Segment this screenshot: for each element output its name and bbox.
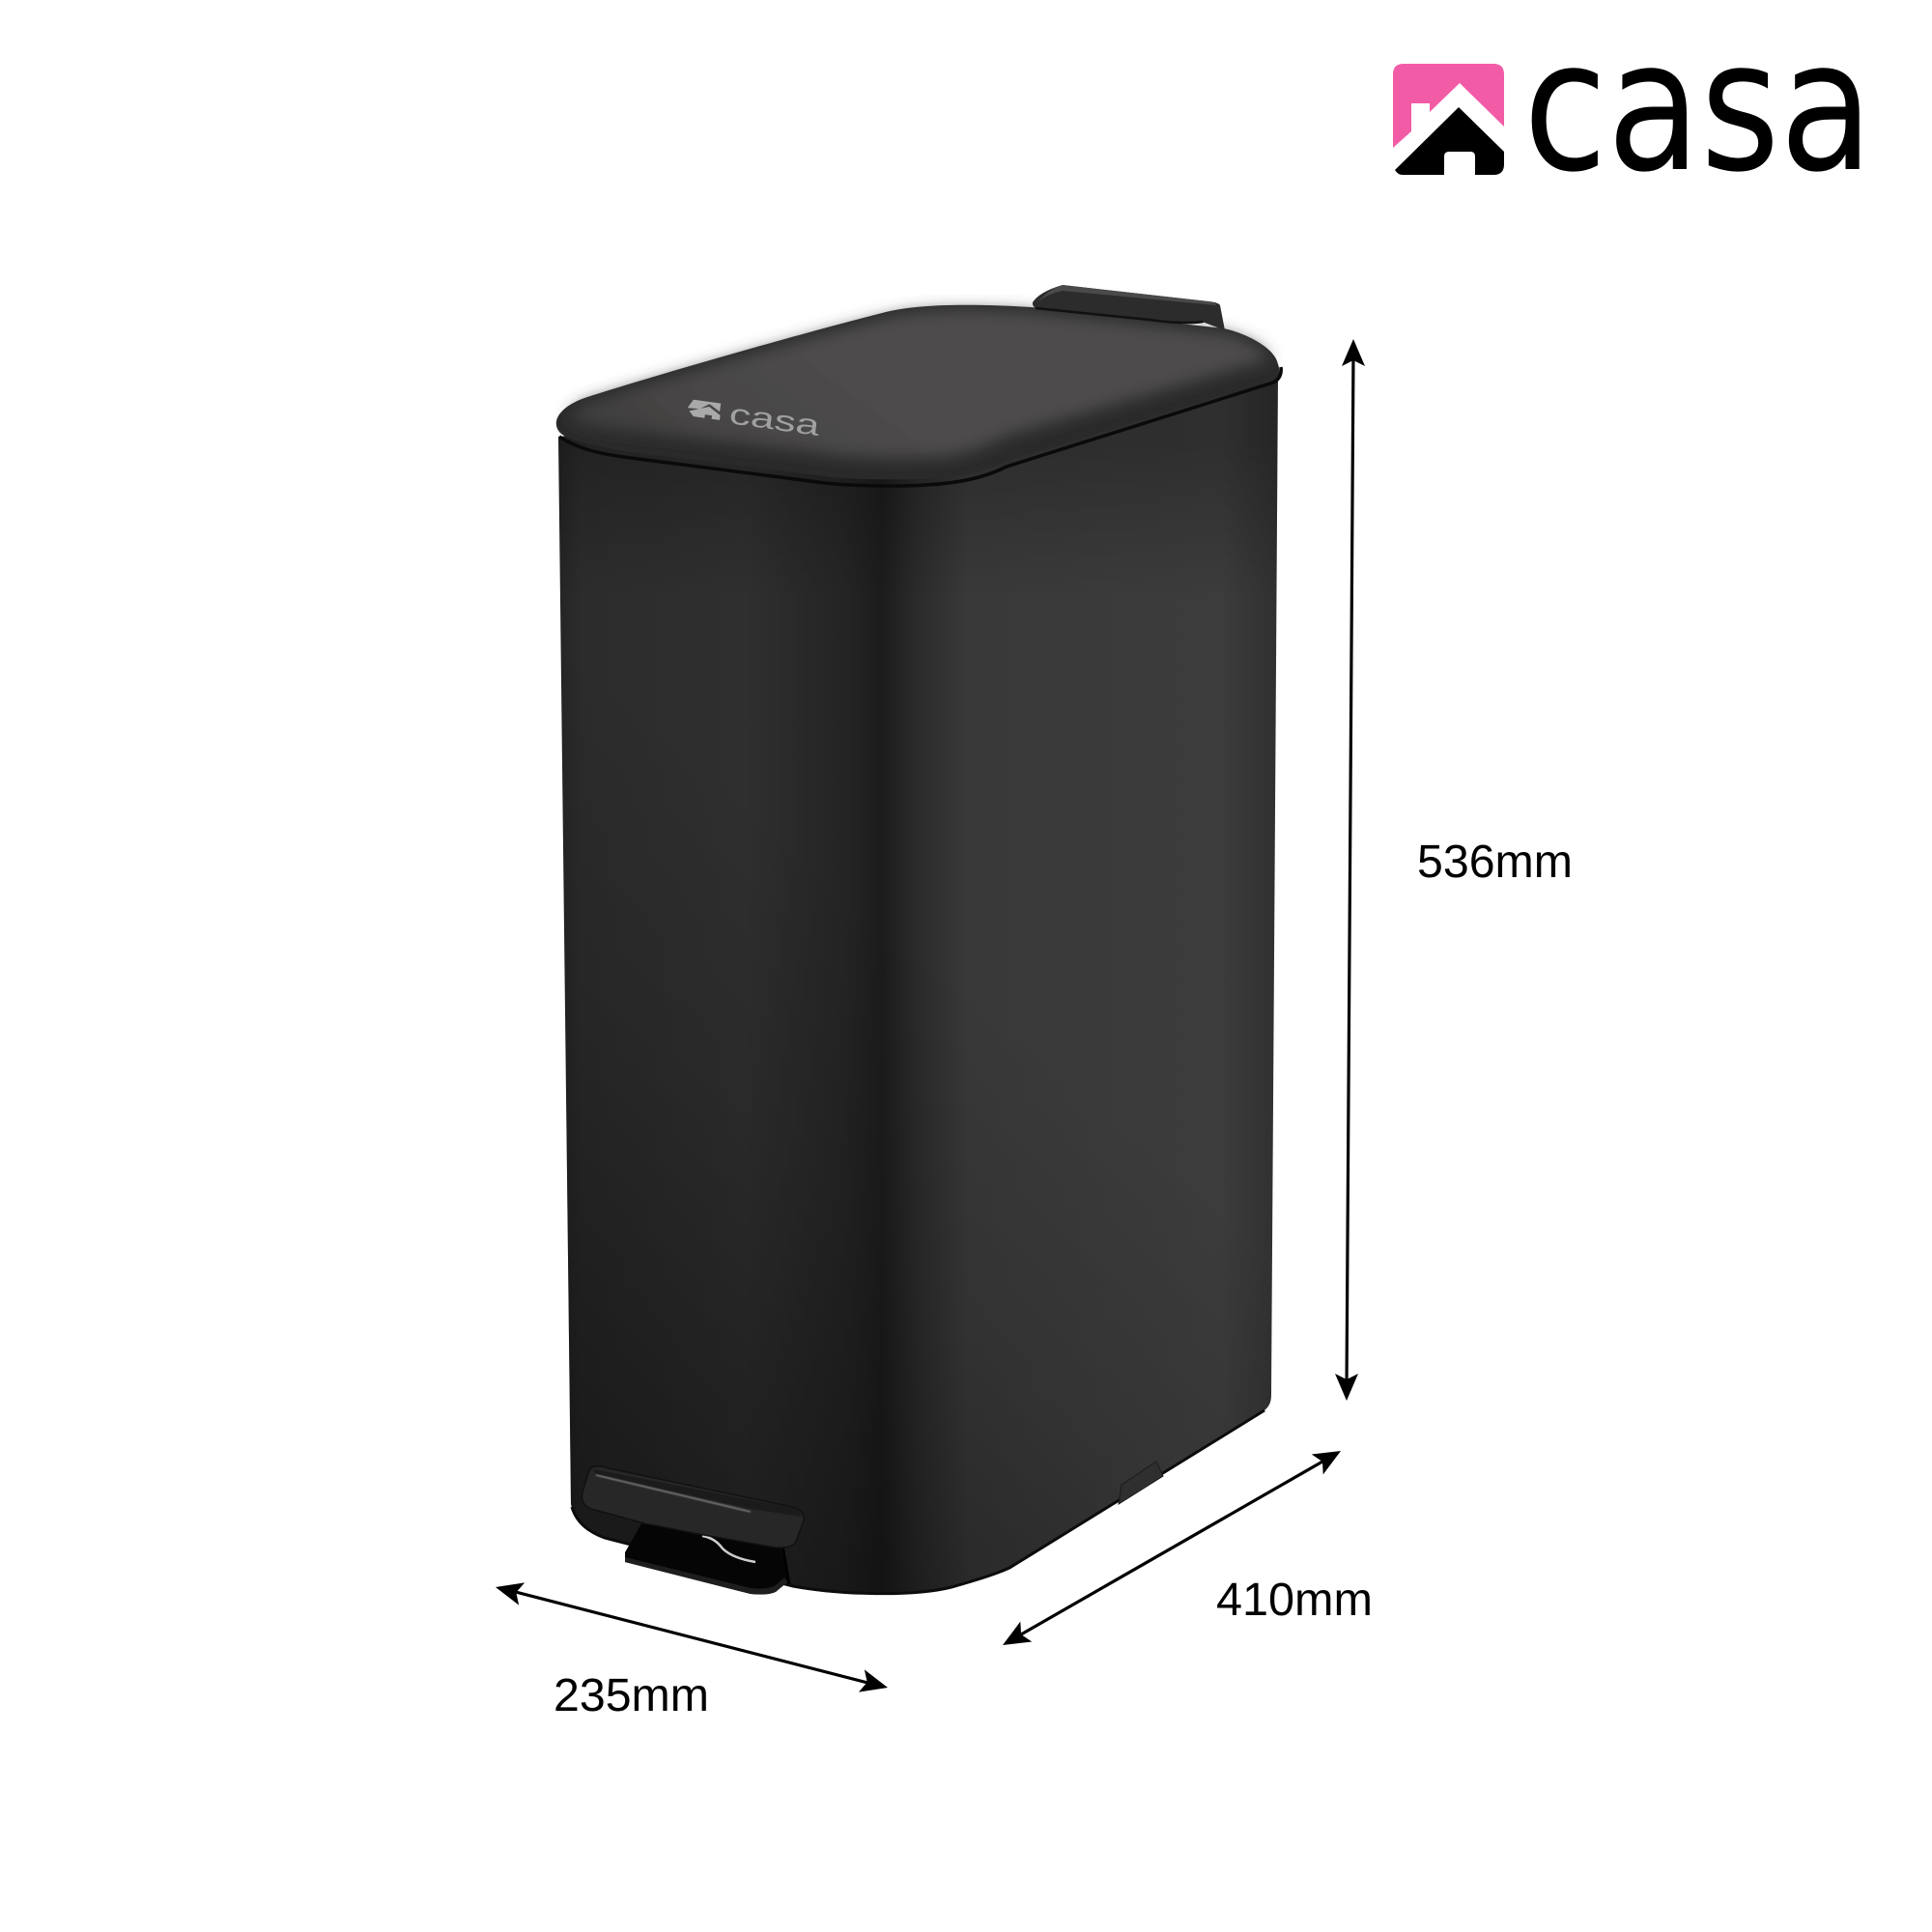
bin lid: [556, 305, 1281, 486]
label: 410mm: 410mm: [1216, 1575, 1373, 1626]
logo: casa: [1393, 2, 1873, 213]
arrow: depth 410mm: [997, 1441, 1347, 1655]
pedal lower bracket: [625, 1519, 787, 1594]
label: 536mm: 536mm: [1417, 837, 1573, 888]
lid logo: [685, 392, 822, 442]
logo icon: pink square with roof cut-out: [1393, 64, 1504, 148]
rear clip: [1119, 1462, 1163, 1504]
product: pedal bin: [556, 285, 1281, 1595]
pedal spring: [702, 1536, 755, 1562]
bottom rim: [572, 1410, 1264, 1594]
lid logo: casa: [727, 398, 822, 442]
logo wordmark: casa: [1523, 2, 1873, 213]
logo icon: black house: [1395, 107, 1504, 175]
arrow: height 536mm: [1335, 339, 1365, 1401]
label: 235mm: 235mm: [554, 1670, 709, 1721]
arrow: width 235mm: [493, 1576, 891, 1699]
pedal bar: [582, 1466, 804, 1548]
bin body: [558, 372, 1278, 1594]
bin handle at rear of lid: [1033, 285, 1225, 330]
lid seam line: [559, 367, 1281, 486]
foot pedal: [582, 1466, 804, 1595]
